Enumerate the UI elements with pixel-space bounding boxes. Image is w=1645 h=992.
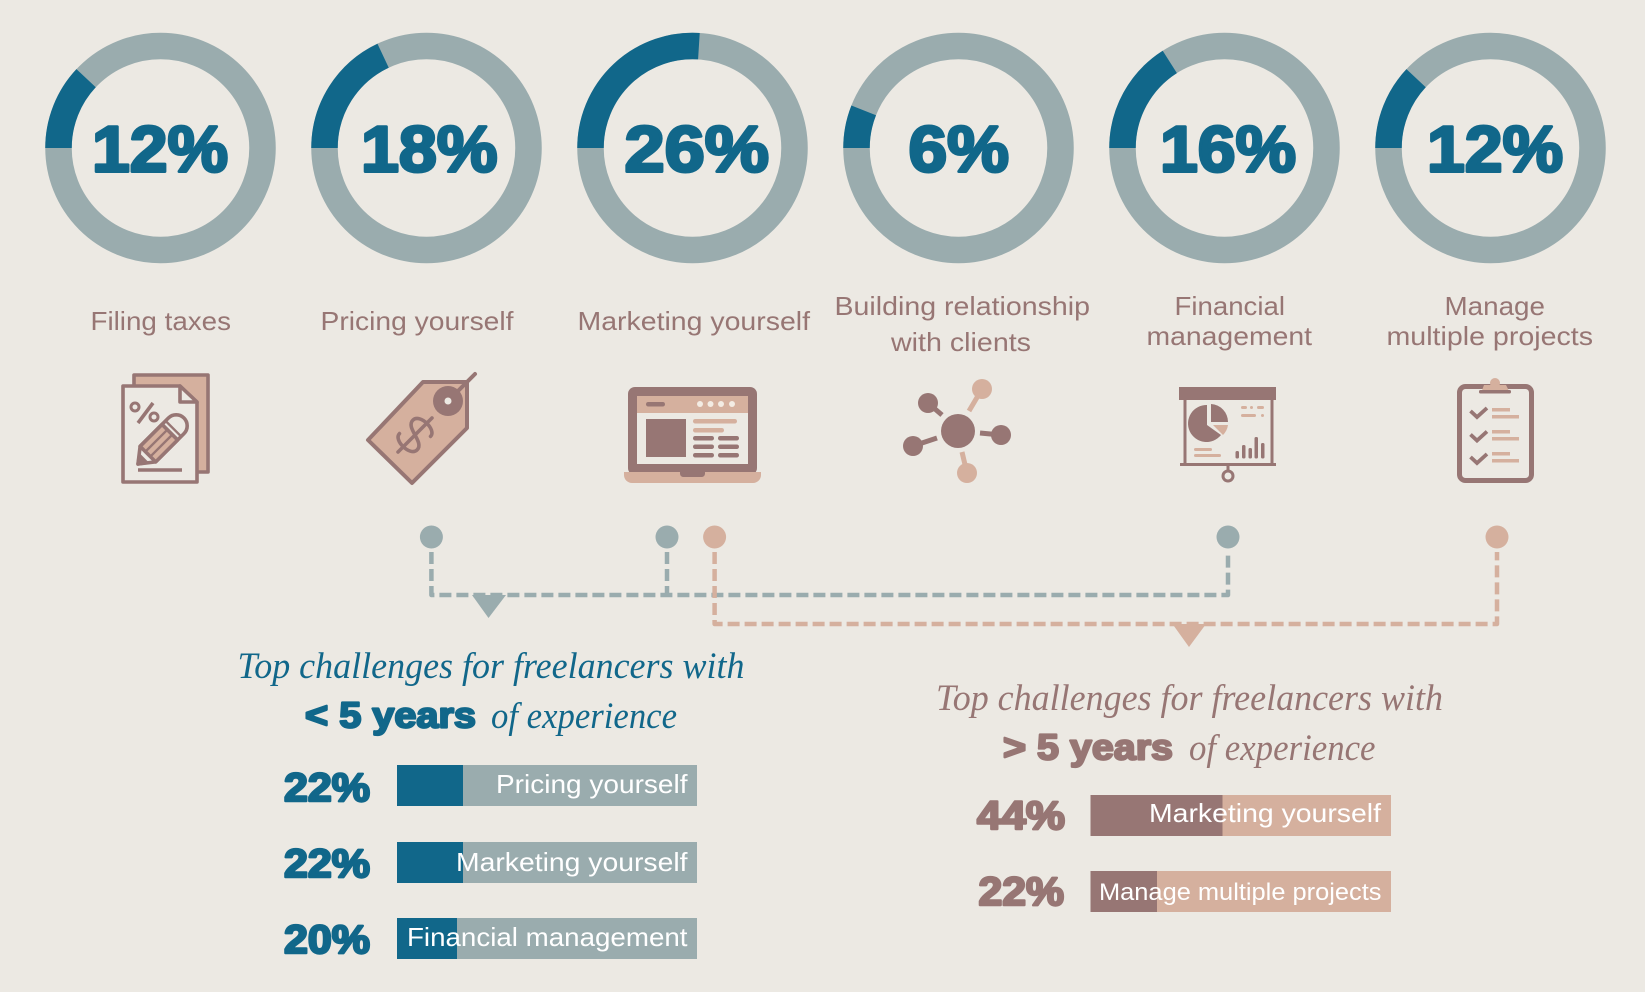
label: marketing yourself: Marketing yourself: [578, 306, 811, 336]
label: manage multiple projects: multiple projects: [1386, 321, 1593, 351]
donut: filing taxes 12%: [58, 46, 262, 250]
heading: over 5 years: > 5 years: [1003, 726, 1173, 768]
label: manage multiple projects: [1386, 291, 1593, 351]
label: financial management: management: [1146, 321, 1313, 351]
icon: presentation board: [1179, 387, 1276, 481]
connector: grey dashed bracket to under 5 years: [420, 526, 1239, 618]
label: pricing yourself: Pricing yourself: [320, 306, 514, 336]
icon: client network: [903, 379, 1011, 483]
heading: under 5 years: [238, 646, 744, 737]
panel: donut charts row: [58, 46, 1592, 250]
donut: building relationship 6%: 6%: [908, 112, 1009, 186]
donut: building relationship 6%: [856, 46, 1060, 250]
bar row: marketing yourself 22%: 22%: [284, 842, 370, 886]
bar row: manage multiple projects 22%: 22%: [978, 870, 1064, 914]
bar row: manage multiple projects 22%: [978, 870, 1391, 914]
bar row: marketing yourself 22%: Marketing yourself: [456, 847, 688, 877]
bar row: marketing yourself 44%: Marketing yourself: [1149, 798, 1382, 828]
bar row: pricing yourself 22%: [284, 765, 697, 810]
donut: financial management 16%: [1122, 46, 1326, 250]
donut: marketing yourself 26%: 26%: [624, 112, 769, 186]
bar row: pricing yourself 22%: 22%: [284, 766, 370, 810]
donut: pricing yourself 18%: 18%: [361, 112, 498, 186]
icon: laptop web page: [624, 387, 761, 483]
heading: under 5 years: < 5 years: [305, 694, 476, 736]
label: financial management: Financial: [1174, 291, 1285, 321]
bar row: marketing yourself 22%: [284, 842, 697, 886]
heading: under 5 years: of experience: [491, 696, 677, 737]
label: manage multiple projects: Manage: [1444, 291, 1545, 321]
heading: over 5 years: Top challenges for freelancers with: [936, 678, 1443, 719]
bar row: marketing yourself 44%: [977, 794, 1391, 838]
label: financial management: [1146, 291, 1313, 351]
bar row: financial management 20%: 20%: [284, 918, 370, 962]
icon: checklist clipboard: [1460, 378, 1532, 480]
heading: over 5 years: of experience: [1189, 728, 1376, 769]
bar row: pricing yourself 22%: Pricing yourself: [496, 769, 688, 799]
donut: manage multiple projects 12%: 12%: [1427, 112, 1563, 186]
donut: financial management 16%: 16%: [1160, 112, 1296, 186]
panel: under 5 years of experience: [238, 646, 744, 962]
bar row: marketing yourself 44%: 44%: [977, 794, 1065, 838]
panel: category labels: [90, 291, 1593, 357]
heading: under 5 years: Top challenges for freelancers with: [238, 646, 744, 687]
donut: filing taxes 12%: 12%: [92, 112, 228, 186]
bar row: financial management 20%: [284, 918, 697, 962]
label: building relationship with clients: [834, 291, 1090, 357]
bar row: manage multiple projects 22%: Manage multiple projects: [1099, 879, 1382, 906]
heading: over 5 years: [936, 678, 1443, 769]
icon: price tag: [368, 374, 475, 483]
bar row: financial management 20%: Financial management: [407, 922, 688, 952]
label: filing taxes: Filing taxes: [90, 306, 231, 336]
panel: over 5 years of experience: [936, 678, 1443, 914]
donut: pricing yourself 18%: [324, 46, 528, 250]
label: building relationship with clients: with clients: [890, 327, 1031, 357]
donut: marketing yourself 26%: [590, 46, 794, 250]
connector: tan dashed bracket to over 5 years: [703, 526, 1508, 647]
icon: tax document with pencil: [123, 375, 208, 482]
label: building relationship with clients: Building relationship: [834, 291, 1090, 321]
donut: manage multiple projects 12%: [1388, 46, 1592, 250]
